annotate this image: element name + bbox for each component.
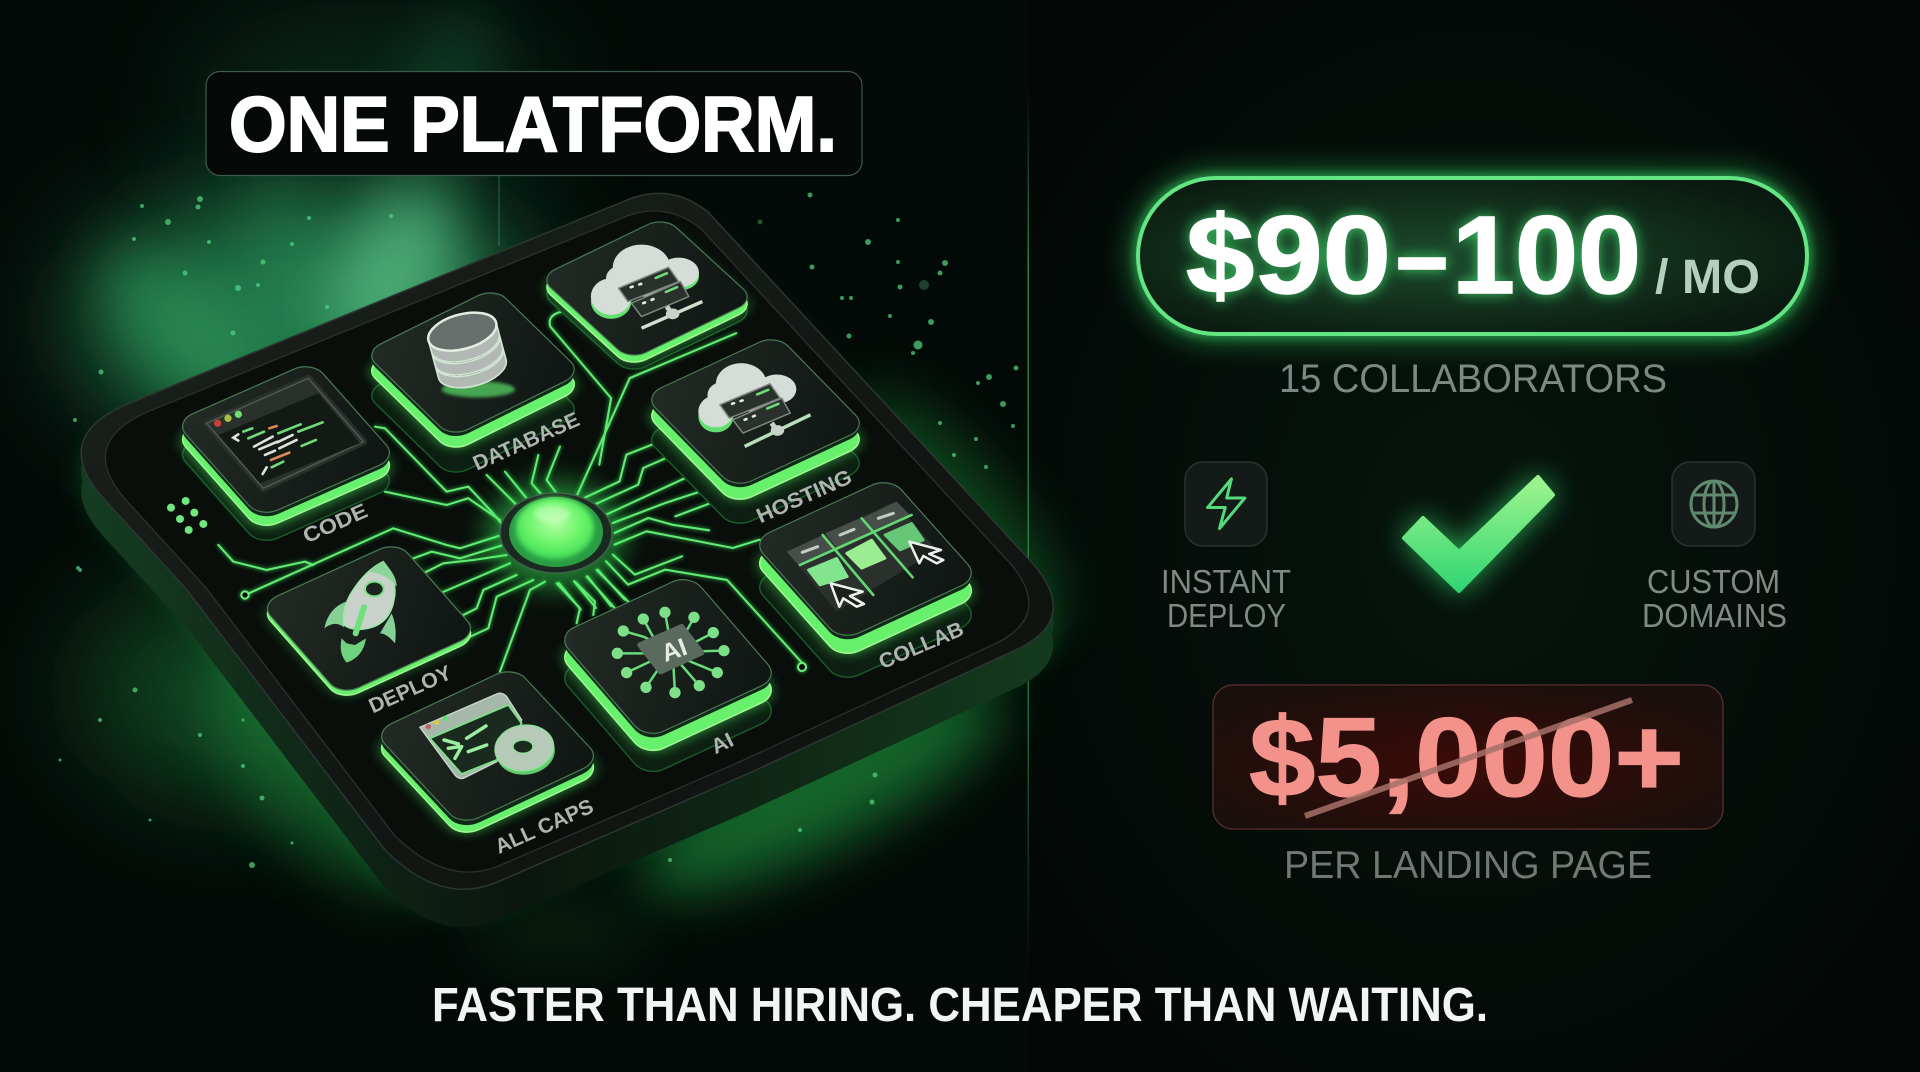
icon: database cylinder: [424, 306, 515, 397]
tagline: FASTER THAN HIRING. CHEAPER THAN WAITING.: [432, 979, 1488, 1032]
label: database: DATABASE: [470, 408, 583, 475]
indicator dots: [167, 497, 207, 534]
tile: database: [364, 287, 582, 478]
price value: $90: [1186, 194, 1391, 317]
per month unit: / MO: [1655, 251, 1760, 304]
strikethrough: [1305, 700, 1632, 816]
label: hosting: HOSTING: [753, 466, 856, 528]
label: collab: COLLAB: [875, 618, 967, 674]
icon: lightning tile: [1185, 462, 1267, 546]
old price value: $5,000+: [1249, 695, 1684, 820]
divider line between panels: [1028, 90, 1029, 970]
text: instant deploy: [1161, 563, 1291, 634]
title: ONE PLATFORM.: [229, 80, 837, 168]
icon: globe tile: [1672, 462, 1755, 546]
text: custom domains: [1642, 563, 1787, 634]
icon: ai chip: [612, 607, 730, 698]
tile: all caps: [374, 666, 601, 839]
price value: [1186, 194, 1641, 317]
tile: collab: [752, 477, 979, 683]
icon: central glowing orb: [487, 483, 623, 587]
text: collaborators: 15 COLLABORATORS: [1279, 357, 1667, 401]
icon: hosting cloud with server rack: [698, 363, 811, 446]
traces: upper left: [218, 427, 560, 570]
circuit traces: [218, 312, 806, 672]
icon: cloud with server rack: [591, 245, 702, 328]
label: all caps: ALL CAPS: [492, 795, 597, 859]
particles: [58, 192, 1018, 868]
trace end node: [798, 663, 806, 671]
icon: code window: [207, 378, 363, 488]
panel: price pill: [1138, 178, 1807, 334]
tile: hosting: [644, 334, 867, 529]
label: code: CODE: [300, 499, 371, 548]
text: instant deploy: INSTANT: [1161, 563, 1291, 600]
tile: ai: [557, 574, 779, 777]
price value: 100: [1452, 194, 1641, 317]
icon: rocket: [324, 562, 397, 663]
connector from title to board: [498, 176, 500, 246]
text: custom domains: DOMAINS: [1642, 597, 1787, 634]
traces: upper and right: [550, 312, 802, 663]
icon: checkmark: [1402, 475, 1555, 593]
price value: –: [1396, 194, 1448, 317]
label: deploy: DEPLOY: [365, 661, 455, 718]
text: custom domains: CUSTOM: [1647, 563, 1780, 600]
tile: cloud server: [539, 217, 755, 374]
icon: kanban board with cursors: [787, 502, 943, 612]
text: per landing page: PER LANDING PAGE: [1284, 844, 1652, 887]
text: chip AI: AI: [658, 633, 691, 668]
text: instant deploy: DEPLOY: [1167, 597, 1286, 634]
icon: window with disc: [420, 693, 558, 779]
panel: isometric platform board: [81, 193, 1053, 927]
tile: deploy: [260, 541, 478, 702]
traces: lower: [241, 528, 630, 672]
panel: old price box: [1213, 685, 1723, 829]
tile: code: [175, 361, 397, 546]
label: ai: AI: [707, 729, 737, 759]
